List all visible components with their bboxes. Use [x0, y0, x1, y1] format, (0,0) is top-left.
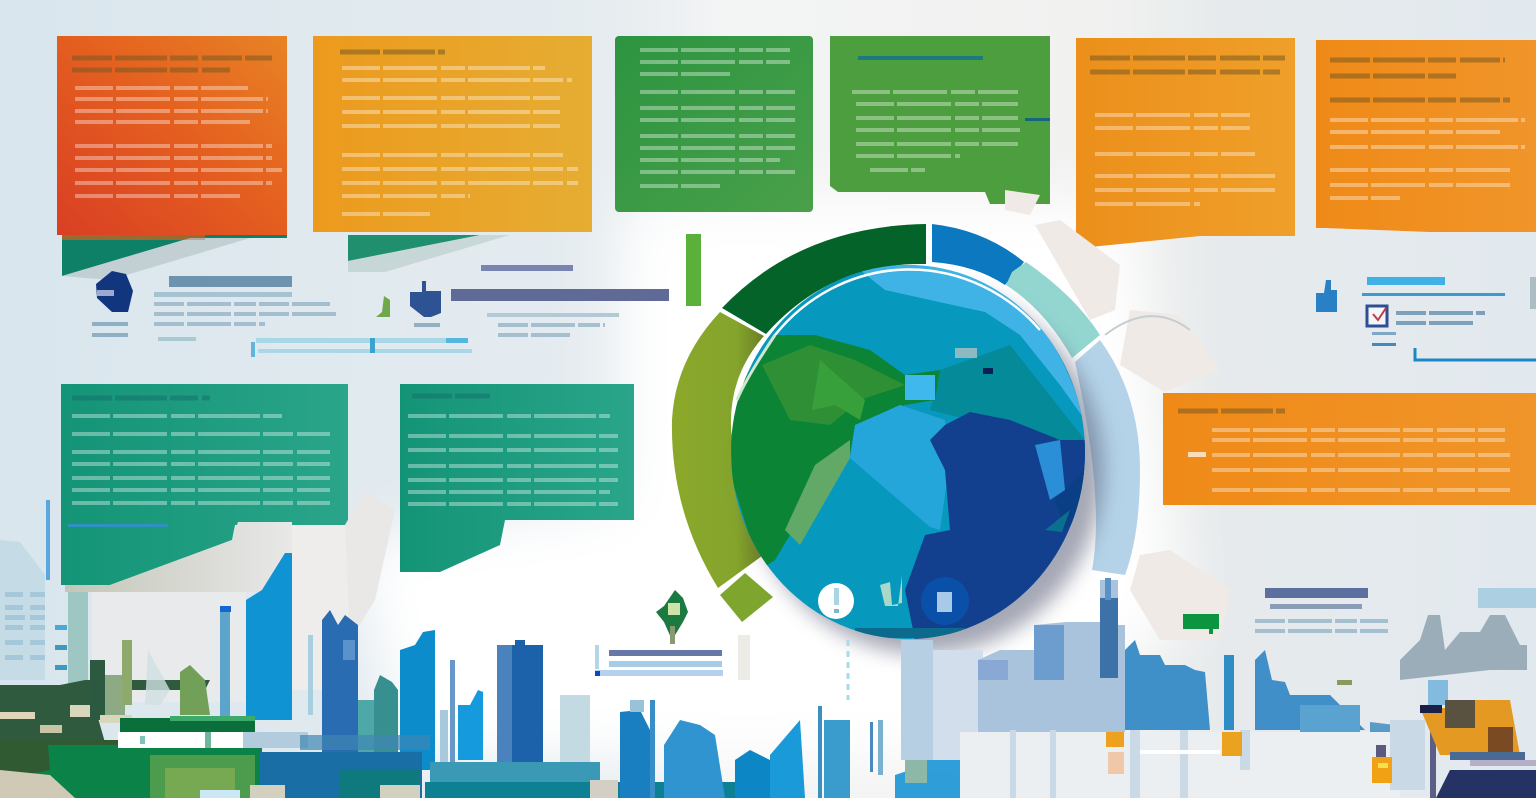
globe: dark bottom rim: [855, 628, 965, 638]
panel: amber text card: [313, 36, 592, 272]
globe outline highlight: [775, 269, 1040, 335]
icon: pale leaf on globe: [880, 576, 902, 606]
white banner strip: [118, 732, 308, 748]
icon: orange pins: [1106, 732, 1392, 783]
ground: green field: [0, 716, 262, 798]
connector bars: [251, 338, 472, 357]
text lines: orange card three: [1090, 58, 1285, 204]
pale city block left: [0, 500, 67, 680]
icon: green speech tag: [1183, 614, 1219, 634]
faint map shapes behind globe right: [1005, 190, 1230, 640]
icon: blue thumbs up: [1316, 280, 1337, 312]
globe disc: [731, 265, 1085, 639]
heading bars: center info block: [414, 265, 669, 335]
white glow around globe: [350, 200, 1180, 760]
icon: small green plant: [376, 296, 390, 317]
globe: bright blue sea patches: [850, 405, 950, 530]
ring segment: blue: [932, 224, 1024, 285]
trees: [0, 640, 210, 760]
ring segment: pale blue: [1075, 340, 1140, 575]
blue mid skyline: [1125, 640, 1425, 745]
ring node: olive diamond: [720, 573, 773, 622]
text lines: teal card two: [408, 396, 618, 504]
pale column below globe: [901, 640, 933, 760]
tall tower D: [497, 640, 543, 767]
icon: blue square badge on globe: [921, 577, 969, 625]
blue tower B: [322, 610, 358, 760]
pale blue skyline: [978, 578, 1125, 732]
text lines: green card two: [852, 92, 1020, 170]
text lines: teal card one: [72, 398, 330, 503]
pale backdrop: [92, 592, 246, 702]
globe shadow: [747, 286, 1103, 654]
globe: light sky arc: [862, 265, 1082, 415]
icon: white alert badge on globe: [818, 583, 854, 619]
skyline right: [848, 578, 1536, 798]
text lines: orange card four: [1330, 60, 1525, 198]
text lines: red card heading: [72, 58, 282, 196]
ground pale strip: [960, 720, 1425, 798]
globe: green land: [730, 335, 940, 570]
teal towers: [374, 675, 398, 760]
small caption block right: [1255, 588, 1388, 631]
globe with segmented ring: [672, 224, 1140, 654]
panel: green text card two: [830, 36, 1050, 204]
icon: blue thumbs badge: [410, 281, 441, 317]
icon row: left info block with globe icon: [92, 271, 338, 341]
ring segment: light teal: [1006, 262, 1100, 358]
ground: blue harbour: [200, 735, 760, 798]
map outline arc: [1105, 316, 1190, 335]
blue tower C: [400, 630, 435, 770]
right info block: [1316, 277, 1536, 360]
panel: orange text card four: [1316, 40, 1536, 232]
panel: wide orange text card: [1163, 393, 1536, 505]
panel: green text card one: [615, 36, 813, 212]
text lines: amber card: [340, 52, 578, 214]
panel: red-orange text card: [57, 36, 287, 280]
panel: teal text card two: [400, 384, 634, 572]
small caption block: [595, 635, 750, 680]
leaf sprout icon: [656, 590, 688, 644]
misty hills right: [1400, 588, 1536, 705]
globe: dark marker: [983, 368, 993, 374]
ring segment: dark green: [722, 224, 926, 334]
skyline left: [0, 490, 968, 798]
blue tower A: [246, 553, 292, 720]
text lines: green card one: [640, 50, 795, 186]
icon: dark blue globe badge: [96, 271, 133, 312]
heading bars: left info block: [154, 276, 338, 341]
panel: orange text card three: [1076, 38, 1295, 248]
text lines: wide orange card: [1178, 411, 1510, 490]
panel: teal text card one: [61, 384, 348, 592]
globe: dark blue continent: [905, 412, 1085, 640]
icon row: center info block: [251, 265, 669, 357]
blue towers lower centre: [620, 700, 968, 798]
excavator machine: [1420, 700, 1536, 798]
icon: checklist badge: [1367, 306, 1387, 326]
icon: green vertical gauge bar: [686, 234, 701, 306]
globe: teal east: [930, 345, 1085, 500]
ring segment: olive green: [672, 312, 764, 588]
